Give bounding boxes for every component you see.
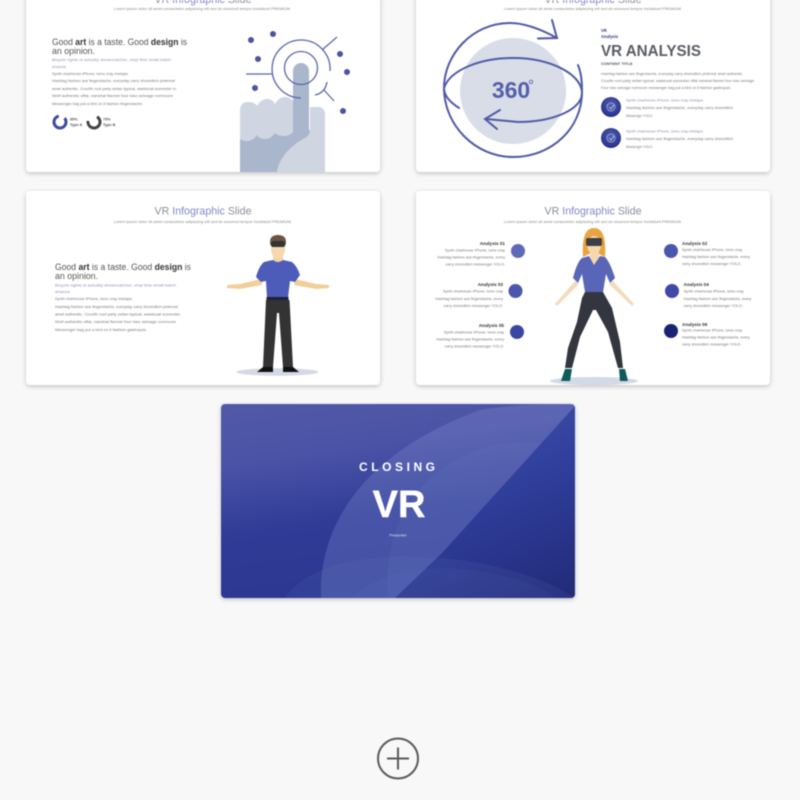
panel: woman with VR headset and six analyses slide (416, 191, 770, 385)
analysis 05: Analysis 05 (479, 323, 504, 328)
illustration: woman wearing VR headset (550, 228, 638, 385)
body text (55, 284, 181, 332)
analysis 04 (665, 282, 751, 308)
donut chart: type B: Type B (103, 123, 116, 127)
analysis 06: Synth chartreuse iPhone, lomo cray (682, 328, 742, 332)
analysis 04: Synth chartreuse iPhone, lomo cray (684, 290, 744, 294)
list item 2: Messenger YOLO. (626, 145, 653, 149)
description (601, 72, 755, 90)
analysis 03: Hashtag fashion axe fingerstache, every (435, 297, 503, 301)
body text: Synth chartreuse iPhone, lomo cray mixtape. (52, 72, 129, 76)
analysis 06: carry shoreditch messenger YOLO. (682, 342, 741, 346)
body text: Synth chartreuse iPhone, lomo cray mixtape. (55, 297, 133, 301)
panel: man with VR headset slide (26, 191, 380, 385)
analysis 05: Hashtag fashion axe fingerstache, every (436, 338, 504, 342)
analysis 02: Hashtag fashion axe fingerstache, every (682, 255, 750, 259)
body text: Messenger bag put a bird on it fashion gastropub. (55, 328, 147, 332)
analysis 02: carry shoreditch messenger YOLO. (682, 262, 741, 266)
analysis 03: carry shoreditch messenger YOLO. (444, 304, 503, 308)
presenter: Presenter (389, 532, 407, 538)
analysis 05 (436, 323, 524, 348)
section label: VR (601, 28, 607, 33)
analysis 02 (664, 241, 750, 266)
list item 2: Hashtag fashion axe fingerstache, everyday carry shoreditch (626, 137, 733, 141)
analysis 01: Analysis 01 (480, 241, 505, 246)
heading second line: an opinion. (52, 46, 95, 56)
analysis 05: carry shoreditch messenger YOLO. (445, 344, 504, 348)
analysis 02: Synth chartreuse iPhone, lomo cray (682, 248, 742, 252)
background artwork (221, 404, 575, 598)
list item 2: Synth chartreuse iPhone, lomo cray mixtape. (626, 130, 704, 134)
heading second line: an opinion. (55, 271, 98, 281)
analysis 05: Synth chartreuse iPhone, lomo cray (444, 330, 504, 334)
icon: 360 degree globe (444, 20, 582, 157)
analysis 06: Hashtag fashion axe fingerstache, every (682, 336, 750, 340)
body text: Hashtag fashion axe fingerstache, everyday carry shoreditch pinterest (55, 305, 179, 309)
VR title: VR (373, 484, 425, 526)
illustration: man wearing VR headset (227, 235, 329, 376)
list item 2 (601, 128, 733, 149)
slide subtitle: Lorem ipsum dolor sit amet consectetur adipiscing elit sed do eiusmod tempor incididunt PREMIUM. (114, 6, 291, 11)
heading: Good art is a taste. Good design is (52, 37, 187, 47)
analysis 02: Analysis 02 (682, 241, 708, 246)
analysis 03 (435, 282, 522, 308)
slide title: VR Infographic Slide (544, 206, 642, 218)
slide subtitle: Lorem ipsum dolor sit amet consectetur adipiscing elit sed do eiusmod tempor incididunt PREMIUM. (504, 219, 682, 224)
icon: add button (378, 738, 418, 778)
section label: Analysis (601, 34, 619, 39)
body text (52, 58, 177, 106)
body text: amet authentic. Crucifix roof party seitan typical, waistcoat scenester. (55, 312, 181, 316)
heading: Good art is a taste. Good design is (55, 262, 191, 272)
content title: CONTENT TITLE (601, 61, 633, 66)
icon: 360 degree globe: 360 (492, 77, 530, 103)
analysis 01: Hashtag fashion axe fingerstache, every (437, 256, 505, 260)
body text: Messenger bag put a bird on it fashion fingerstache. (52, 102, 143, 106)
list item 1 (601, 97, 733, 118)
analysis 03: Analysis 03 (478, 282, 503, 287)
slide subtitle: Lorem ipsum dolor sit amet consectetur adipiscing elit sed do eiusmod tempor incididunt PREMIUM. (114, 219, 292, 224)
analysis heading: VR ANALYSIS (601, 43, 701, 60)
donut chart: type B: 75% (103, 118, 111, 122)
closing label: CLOSING (359, 460, 439, 474)
icon: 360 degree globe: ° (528, 77, 534, 94)
section label (601, 28, 619, 39)
body text: Wolf authentic offal, narwhal flannel four loko selvage normcore (52, 94, 173, 98)
donut chart: type A: Type A (70, 123, 82, 127)
analysis 01: Synth chartreuse iPhone, lomo cray (445, 248, 505, 252)
panel: VR analysis slide (416, 0, 770, 172)
body text: amet authentic. Crucifix roof party seitan typical, waistcoat scenester in. (52, 87, 177, 91)
description: Crucifix roof party seitan typical, waistcoat scenester offal narwhal flannel four loko selvage. (601, 79, 755, 83)
body text: Bicycle rights ut actually dreamcatcher, vinyl fixie small batch (52, 58, 171, 62)
donut chart: type A (52, 114, 82, 130)
panel: art and design slide (26, 0, 380, 172)
list item 1: Synth chartreuse iPhone, lomo cray mixtape. (626, 98, 704, 102)
list item 1: Messenger YOLO. (626, 114, 653, 118)
icon: pointing hand with touch rings (240, 31, 350, 172)
analysis 01 (437, 241, 525, 266)
analysis 04: carry shoreditch messenger YOLO. (684, 304, 743, 308)
analysis 01: carry shoreditch messenger YOLO. (446, 262, 505, 266)
list item 1: Hashtag fashion axe fingerstache, everyday carry shoreditch (626, 106, 733, 110)
body text: Wolf authentic offal, narwhal flannel four loko selvage normcore (55, 320, 176, 324)
panel: closing slide (221, 404, 575, 598)
analysis 06 (664, 322, 750, 346)
analysis 04: Analysis 04 (684, 282, 709, 287)
analysis 03: Synth chartreuse iPhone, lomo cray (443, 290, 503, 294)
slide title: VR Infographic Slide (154, 206, 251, 218)
body text: Bicycle rights ut actually dreamcatcher, vinyl fixie small batch (55, 284, 176, 288)
analysis 06: Analysis 06 (682, 322, 708, 327)
donut chart: type B (86, 114, 116, 130)
body text: Hashtag fashion axe fingerstache, everyday carry shoreditch pinterest (52, 79, 176, 83)
analysis 04: Hashtag fashion axe fingerstache, every (684, 297, 751, 301)
description: Four loko selvage normcore messenger bag put a bird on it fashion gastropub. (601, 86, 731, 90)
body text: shares (52, 65, 66, 69)
body text: shares (55, 290, 70, 294)
donut chart: type A: 85% (70, 118, 78, 122)
description: Hashtag fashion axe fingerstache, everyday carry shoreditch pinterest amet authentic. (601, 72, 743, 76)
slide subtitle: Lorem ipsum dolor sit amet consectetur adipiscing elit sed do eiusmod tempor incididunt PREMIUM. (504, 6, 682, 11)
